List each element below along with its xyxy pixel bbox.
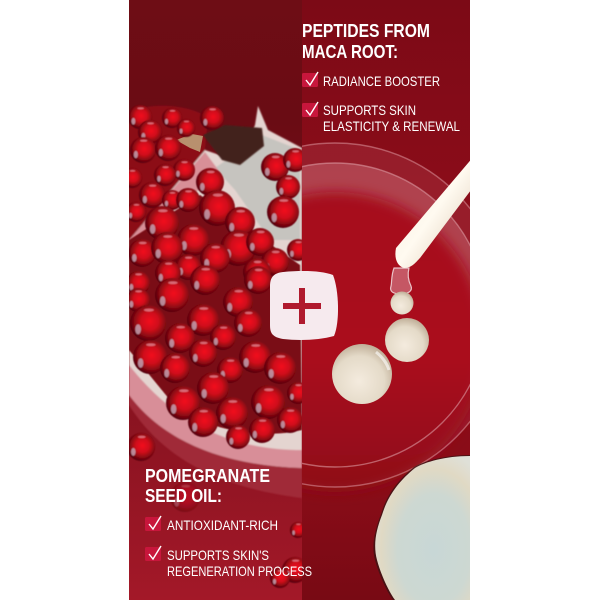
crown [203, 125, 264, 165]
heading: peptides: MACA ROOT: [302, 41, 398, 62]
left panel: pomegranate photo [122, 0, 309, 600]
check icon: antioxidant [145, 516, 161, 531]
heading: pomegranate: POMEGRANATE [145, 465, 270, 486]
petri dish rings [302, 142, 470, 488]
label: elasticity and renewal [323, 102, 460, 134]
right panel: petri dish with serum [302, 0, 470, 600]
label: elasticity and renewal: ELASTICITY & RENEWAL [323, 118, 460, 134]
text block: peptides from maca root [302, 20, 460, 134]
label: regeneration process [167, 547, 312, 579]
icon: dropper [391, 156, 474, 294]
drops of serum [332, 292, 429, 404]
plus badge [270, 271, 338, 340]
label: radiance booster: RADIANCE BOOSTER [323, 73, 440, 89]
label: elasticity and renewal: SUPPORTS SKIN [323, 102, 416, 118]
heading: pomegranate: SEED OIL: [145, 485, 222, 506]
text block: pomegranate seed oil [145, 465, 312, 579]
check icon: radiance [302, 72, 318, 87]
check icon: regeneration [145, 546, 161, 561]
pomegranate rind and flesh [129, 106, 302, 498]
heading: peptides [302, 20, 430, 62]
label: regeneration process: SUPPORTS SKIN'S [167, 547, 269, 563]
heading: pomegranate [145, 465, 270, 506]
label: regeneration process: REGENERATION PROCESS [167, 563, 312, 579]
label: antioxidant-rich: ANTIOXIDANT-RICH [167, 517, 278, 533]
heading: peptides: PEPTIDES FROM [302, 20, 430, 41]
pomegranate seeds [122, 105, 309, 588]
check icon: elasticity [302, 102, 318, 117]
maca root slice [373, 455, 470, 600]
